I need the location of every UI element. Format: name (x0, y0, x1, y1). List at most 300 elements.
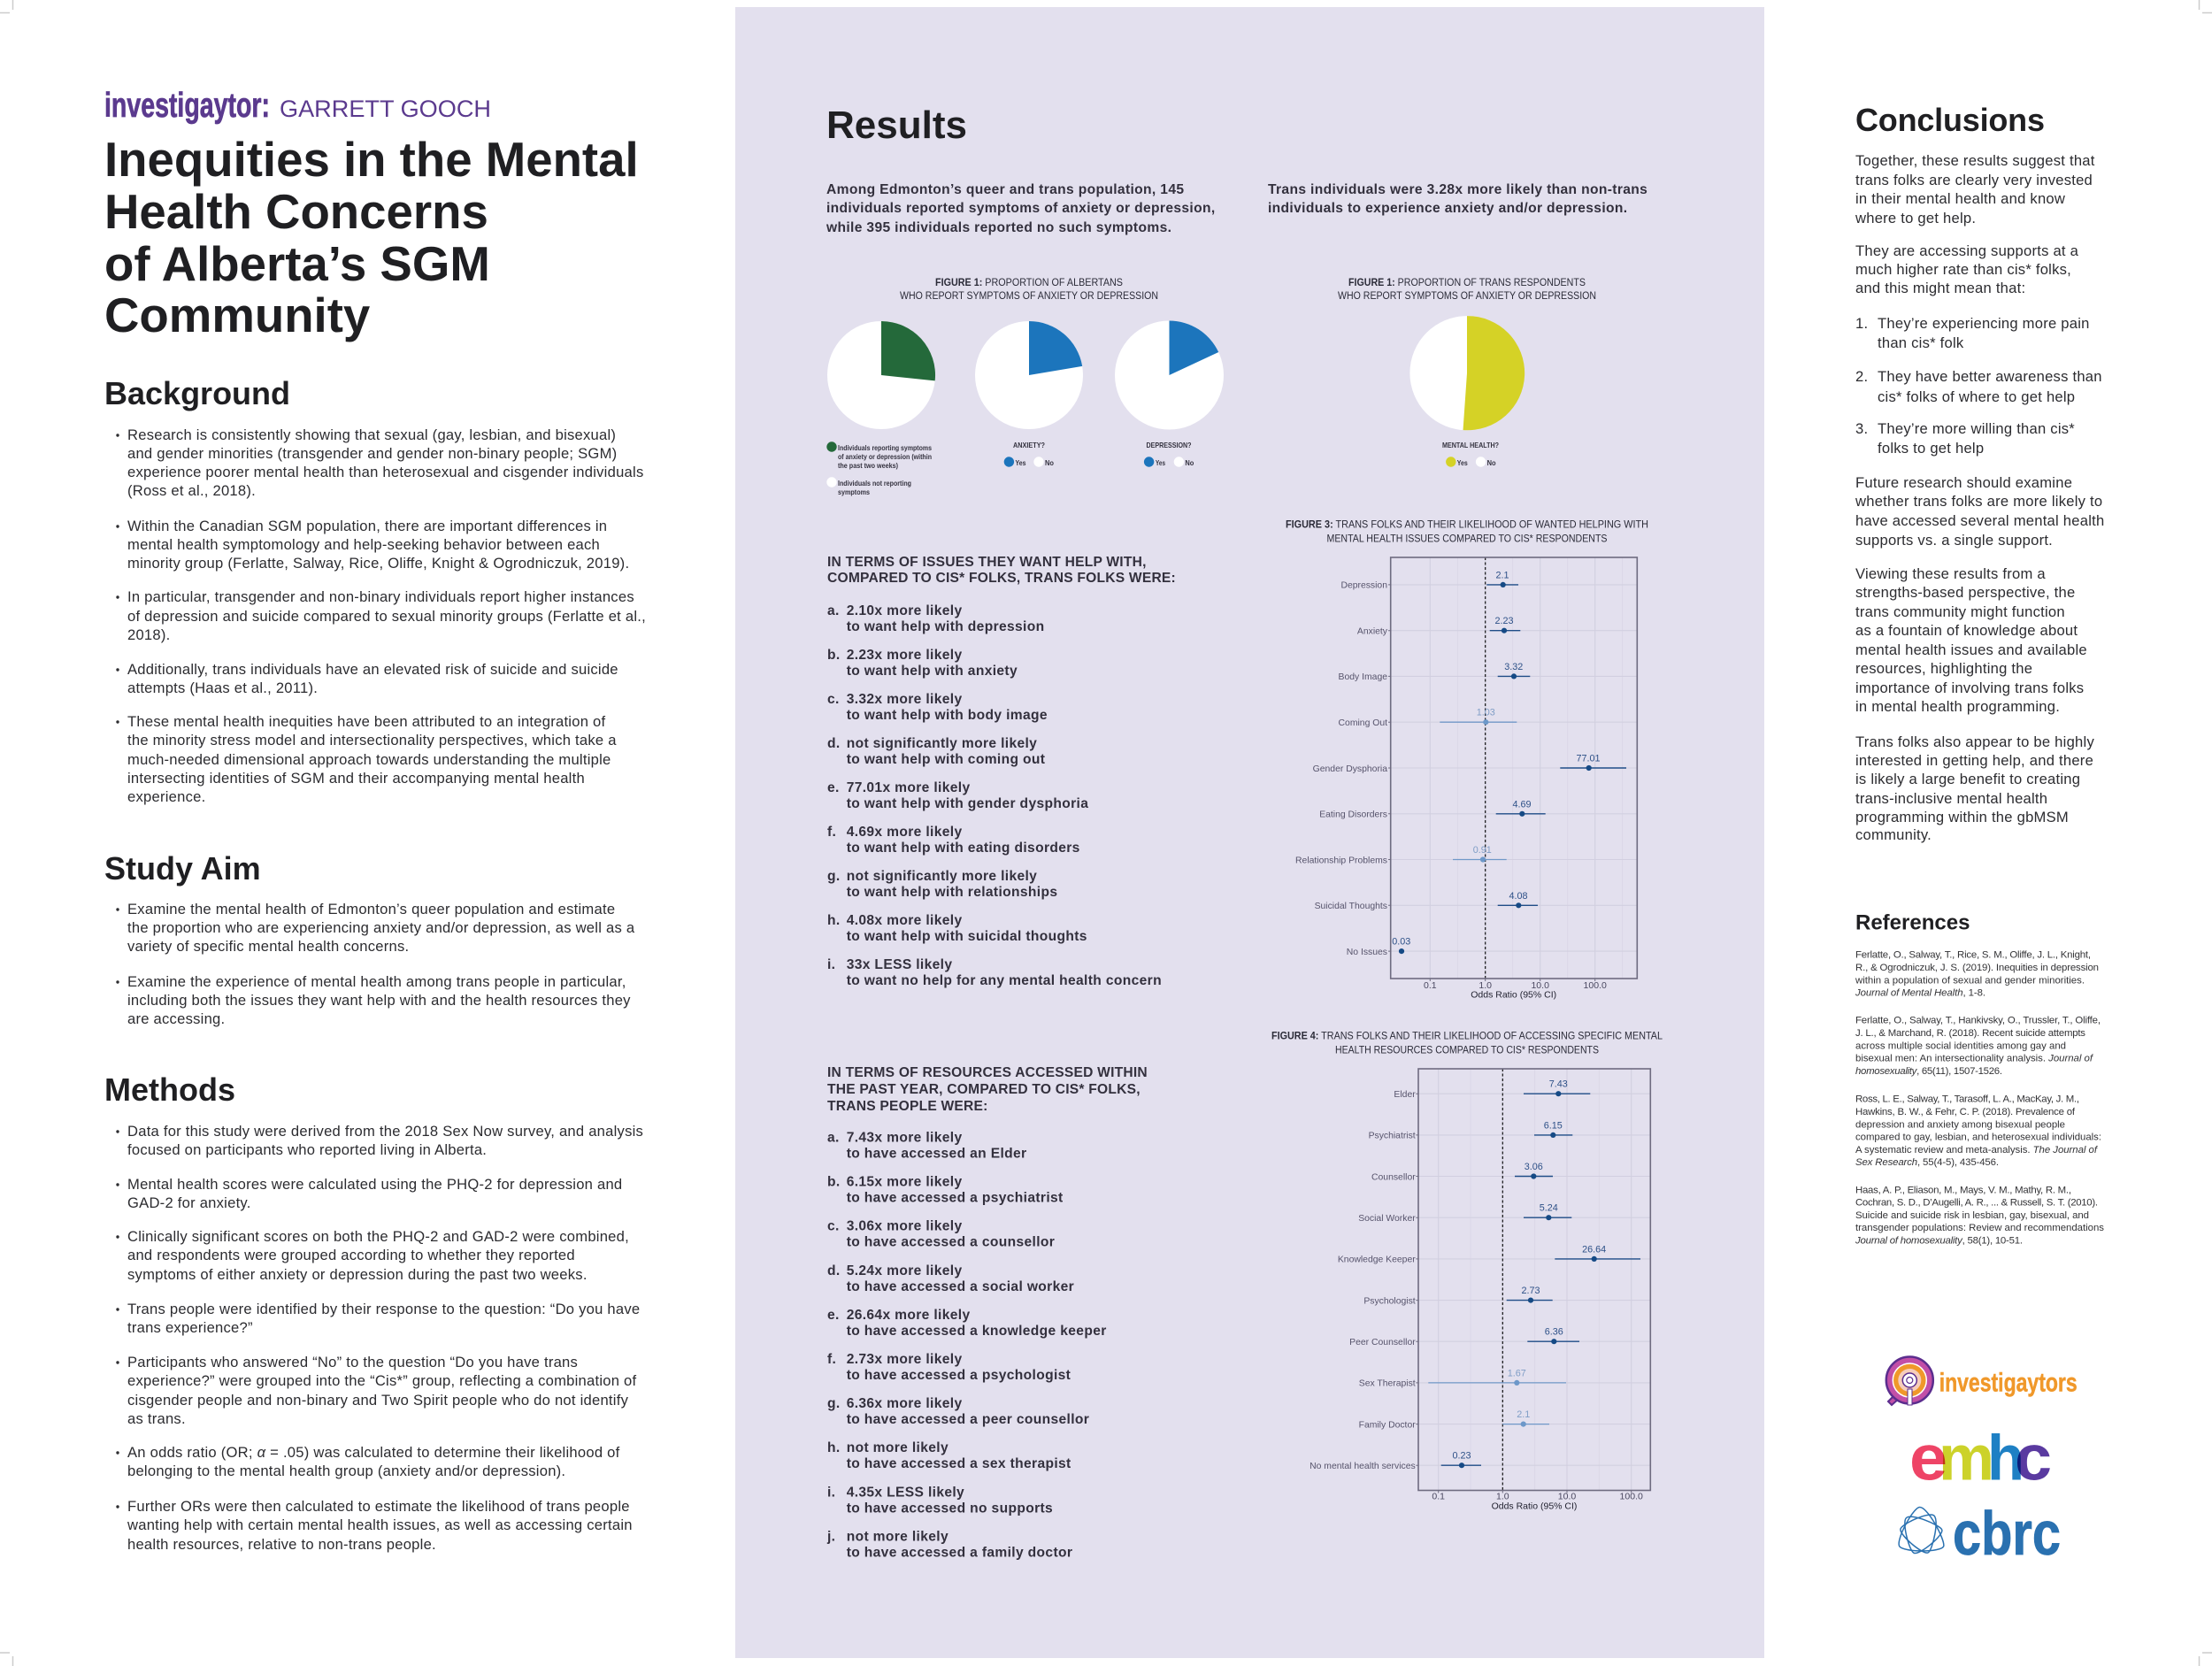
legend: depression: Yes (1156, 458, 1165, 467)
text block: background bullets: minority group (Ferlatte, Salway, Rice, Oliffe, Knight & Ogrodniczuk, 2019). (127, 555, 629, 572)
text block: conclusions: where to get help. (1855, 210, 1976, 226)
list: issues trans folks want help with: g. (827, 869, 841, 884)
heading: references: References (1855, 911, 1970, 935)
axis: figure 3 (1424, 980, 1607, 1000)
list: resources accessed: e. (827, 1308, 840, 1323)
row: knowledge keeper: 26.64 (1582, 1244, 1606, 1255)
text block: conclusions: They’re more willing than cis* (1878, 420, 2075, 437)
title: Community (104, 288, 371, 342)
list: issues trans folks want help with: to want help with depression (847, 619, 1044, 634)
axis: figure 3: 1.0 (1479, 980, 1492, 991)
axis: figure 4 (1432, 1492, 1643, 1512)
heading: conclusions: Conclusions (1855, 102, 2045, 138)
axis: figure 4: 0.1 (1432, 1492, 1445, 1502)
list: resources accessed: to have accessed no supports (847, 1501, 1053, 1516)
list: resources accessed: d. (827, 1263, 841, 1278)
text block: study aim bullets (116, 901, 635, 1027)
text block: methods bullets: Trans people were identified by their response to the question: “Do you have (127, 1301, 640, 1317)
text block: methods bullets: trans experience?” (127, 1319, 253, 1336)
header: investigaytor byline: GARRETT GOOCH (280, 96, 491, 122)
list: issues trans folks want help with: to want help with suicidal thoughts (847, 929, 1087, 944)
list: resources accessed: 26.64x more likely (847, 1308, 971, 1323)
axis: figure 3: 0.1 (1424, 980, 1437, 991)
text block: references: Ferlatte, O., Salway, T., Hankivsky, O., Trussler, T., Oliffe, (1855, 1016, 2101, 1026)
text block: references: Hawkins, B. W., & Fehr, C. P. (2018). Prevalence of (1855, 1107, 2076, 1117)
text block: methods bullets: Participants who answered “No” to the question “Do you have trans (127, 1354, 578, 1370)
text block: conclusions: 2. (1855, 368, 1868, 385)
row: suicidal thoughts: 4.08 (1509, 891, 1528, 902)
list: issues trans folks want help with: to want help with body image (847, 708, 1048, 723)
list: issues trans folks want help with: not significantly more likely (847, 736, 1037, 751)
legend: overall symptoms: the past two weeks) (838, 461, 898, 470)
list: issues trans folks want help with: a. (827, 603, 840, 618)
row: no mental health services: No mental health services (1310, 1462, 1416, 1471)
text block: methods bullets: as trans. (127, 1410, 186, 1427)
logo: emhc: e (1909, 1424, 1947, 1494)
text block: conclusions: much higher rate than cis* folks, (1855, 261, 2071, 278)
heading: methods: Methods (104, 1071, 235, 1108)
row: no issues: 0.03 (1392, 937, 1410, 948)
row: anxiety (1357, 616, 1520, 637)
legend: depression: No (1185, 458, 1194, 467)
row: psychologist: Psychologist (1363, 1296, 1416, 1306)
row: body image: Body Image (1339, 672, 1387, 682)
row: family doctor: Family Doctor (1359, 1420, 1416, 1430)
row: psychiatrist: 6.15 (1544, 1120, 1563, 1131)
list: issues trans folks want help with: e. (827, 780, 840, 795)
text block: methods bullets: cisgender people and non-binary and Two Spirit people who do not identify (127, 1392, 629, 1409)
list: resources accessed: 4.35x LESS likely (847, 1485, 964, 1500)
row: psychologist (1363, 1286, 1553, 1306)
figure title: figure 3: FIGURE 3: TRANS FOLKS AND THEIR LIKELIHOOD OF WANTED HELPING WITH (1286, 520, 1648, 531)
list: resources accessed: to have accessed a knowledge keeper (847, 1324, 1107, 1339)
row: coming out: 1.03 (1477, 708, 1495, 718)
axis: figure 3: 10.0 (1531, 980, 1549, 991)
list: resources accessed: to have accessed a family doctor (847, 1545, 1072, 1560)
logo: cbrc: cbrc (1953, 1499, 2061, 1568)
row: sex therapist: 1.67 (1508, 1368, 1526, 1378)
text block: methods bullets: symptoms of either anxiety or depression during the past two weeks. (127, 1266, 588, 1283)
text block: background bullets: In particular, transgender and non-binary individuals report higher instances (127, 588, 634, 605)
figure title: proportion of trans respondents: FIGURE 1: PROPORTION OF TRANS RESPONDENTS (1348, 278, 1586, 288)
text block: references: depression and anxiety among bisexual people (1855, 1119, 2065, 1130)
list: issues trans folks want help with: 3.32x more likely (847, 692, 962, 707)
text block: conclusions: Future research should examine (1855, 474, 2072, 491)
text block: conclusions: interested in getting help, and there (1855, 752, 2093, 769)
list: issues trans folks want help with: 77.01x more likely (847, 780, 971, 795)
row: suicidal thoughts: Suicidal Thoughts (1315, 902, 1387, 911)
text block: references: homosexuality, 65(11), 1507-1526. (1855, 1066, 2002, 1077)
text block: methods bullets: Further ORs were then calculated to estimate the likelihood of trans people (127, 1498, 630, 1515)
list: resources accessed: to have accessed a social worker (847, 1279, 1074, 1294)
row: depression: Depression (1340, 581, 1387, 591)
list: issues trans folks want help with: 2.23x more likely (847, 648, 962, 663)
list: resources accessed: 2.73x more likely (847, 1352, 962, 1367)
axis: figure 4: 100.0 (1620, 1492, 1643, 1502)
text block: background bullets: attempts (Haas et al., 2011). (127, 679, 318, 696)
text block: references: compared to gay, lesbian, and heterosexual individuals: (1855, 1132, 2101, 1143)
axis: figure 4: Odds Ratio (95% CI) (1492, 1501, 1577, 1512)
list: issues trans folks want help with: c. (827, 692, 840, 707)
text block: methods bullets: experience?” were grouped into the “Cis*” group, reflecting a combination of (127, 1372, 637, 1389)
list: resources accessed: to have accessed a peer counsellor (847, 1412, 1089, 1427)
text block: conclusions: whether trans folks are more likely to (1855, 493, 2102, 510)
row: family doctor (1359, 1409, 1549, 1430)
legend: overall symptoms: of anxiety or depression (within (838, 452, 932, 461)
text block: references: Journal of Mental Health, 1-8. (1855, 988, 1985, 999)
list: issues trans folks want help with: not significantly more likely (847, 869, 1037, 884)
row: peer counsellor: Peer Counsellor (1349, 1338, 1416, 1347)
row: knowledge keeper (1338, 1244, 1640, 1265)
text block: conclusions: in mental health programming. (1855, 698, 2060, 715)
figure title: figure 4 (1271, 1032, 1663, 1056)
text block: conclusions: than cis* folk (1878, 334, 1964, 351)
text block: methods bullets: wanting help with certain mental health issues, as well as accessing certain (127, 1516, 633, 1533)
row: sex therapist (1359, 1368, 1566, 1389)
text block: references: Sex Research, 55(4-5), 435-456. (1855, 1157, 1999, 1168)
text block: conclusions: Trans folks also appear to be highly (1855, 733, 2094, 750)
list: resources accessed: to have accessed a sex therapist (847, 1456, 1071, 1471)
text block: results summary left: Among Edmonton’s queer and trans population, 145 (826, 182, 1184, 197)
list: issues trans folks want help with: to want help with coming out (847, 752, 1045, 767)
row: eating disorders: Eating Disorders (1319, 810, 1387, 820)
row: no issues: No Issues (1347, 948, 1387, 957)
text block: study aim bullets: variety of specific mental health concerns. (127, 938, 409, 955)
text block: background bullets (116, 426, 646, 805)
text block: conclusions: importance of involving trans folks (1855, 679, 2084, 696)
legend: overall symptoms: symptoms (838, 488, 870, 496)
row: anxiety: Anxiety (1357, 626, 1388, 637)
row: no mental health services: 0.23 (1452, 1451, 1471, 1462)
text block: conclusions: and this might mean that: (1855, 280, 2025, 296)
text block: conclusions: They’re experiencing more pain (1878, 315, 2090, 332)
list: resources accessed: 3.06x more likely (847, 1219, 962, 1234)
list: issues trans folks want help with: f. (827, 825, 836, 840)
list: issues trans folks want help with: 2.10x more likely (847, 603, 962, 618)
list: issues trans folks want help with: 4.69x more likely (847, 825, 962, 840)
row: counsellor: Counsellor (1371, 1172, 1416, 1182)
list: resources accessed: j. (826, 1529, 835, 1544)
pie: overall symptoms (827, 321, 935, 429)
list: resources accessed: c. (827, 1219, 840, 1234)
list: issues trans folks want help with: COMPARED TO CIS* FOLKS, TRANS FOLKS WERE: (827, 571, 1176, 586)
chart: figure 4 forest plot (1310, 1069, 1650, 1512)
logo: emhc: h (1987, 1424, 2024, 1494)
row: counsellor: 3.06 (1525, 1162, 1543, 1172)
text block: conclusions: They have better awareness than (1878, 368, 2102, 385)
row: no mental health services (1310, 1451, 1481, 1471)
legend: overall symptoms (826, 441, 932, 496)
figure title: figure 3 (1286, 520, 1648, 545)
text block: conclusions: folks to get help (1878, 440, 1984, 457)
text block: conclusions: They are accessing supports at a (1855, 242, 2079, 259)
title (104, 133, 639, 342)
text block: background bullets: intersecting identities of SGM and their accompanying mental health (127, 770, 585, 787)
row: gender dysphoria: 77.01 (1576, 754, 1601, 764)
text block: background bullets: Additionally, trans individuals have an elevated risk of suicide and suicide (127, 661, 618, 678)
row: social worker: 5.24 (1540, 1203, 1558, 1214)
list: issues trans folks want help with: to want no help for any mental health concern (847, 973, 1162, 988)
text block: conclusions: in their mental health and know (1855, 190, 2066, 207)
text block: study aim bullets: including both the issues they want help with and the health resources they (127, 992, 631, 1009)
text block: background bullets: and gender minorities (transgender and gender non-binary people; SGM) (127, 445, 617, 462)
axis: figure 4: 1.0 (1496, 1492, 1509, 1502)
list: issues trans folks want help with: to want help with gender dysphoria (847, 796, 1088, 811)
row: coming out: Coming Out (1339, 718, 1387, 728)
row: sex therapist: Sex Therapist (1359, 1379, 1416, 1389)
list: resources accessed: 6.15x more likely (847, 1175, 962, 1190)
row: depression: 2.1 (1495, 570, 1509, 580)
figure title: figure 4: HEALTH RESOURCES COMPARED TO CIS* RESPONDENTS (1335, 1046, 1599, 1056)
text block: background bullets: much-needed dimensional approach towards understanding the multiple (127, 751, 611, 768)
text block: references: within a population of sexual and gender minorities. (1855, 975, 2085, 986)
list: resources accessed: THE PAST YEAR, COMPARED TO CIS* FOLKS, (827, 1082, 1141, 1097)
text block: references: Haas, A. P., Eliason, M., Mays, V. M., Mathy, R. M., (1855, 1185, 2071, 1195)
heading: results: Results (826, 104, 967, 147)
row: psychiatrist: Psychiatrist (1369, 1132, 1416, 1141)
figure title: proportion of albertans (900, 278, 1158, 302)
text block: background bullets: 2018). (127, 626, 170, 643)
text block: methods bullets: GAD-2 for anxiety. (127, 1194, 251, 1211)
text block: references: across multiple social identities among gay and (1855, 1040, 2066, 1051)
list: issues trans folks want help with (827, 555, 1176, 988)
row: psychologist: 2.73 (1521, 1286, 1540, 1296)
text block: conclusions: supports vs. a single support. (1855, 532, 2053, 549)
text block: references: Ferlatte, O., Salway, T., Rice, S. M., Oliffe, J. L., Knight, (1855, 950, 2091, 961)
list: issues trans folks want help with: 33x LESS likely (847, 957, 952, 972)
row: elder: 7.43 (1549, 1079, 1568, 1090)
row: coming out (1339, 708, 1517, 728)
panel: results background (735, 7, 1764, 1658)
text block: conclusions: as a fountain of knowledge about (1855, 622, 2078, 639)
axis: figure 3: 100.0 (1584, 980, 1607, 991)
legend: overall symptoms: Individuals reporting symptoms (838, 443, 932, 452)
text block: results summary left: individuals reported symptoms of anxiety or depression, (826, 201, 1216, 216)
text block: background bullets: Within the Canadian SGM population, there are important differences in (127, 518, 607, 534)
text block: references: R., & Ogrodniczuk, J. S. (2019). Inequities in depression (1855, 963, 2099, 973)
row: relationship problems: 0.91 (1473, 845, 1492, 856)
list: issues trans folks want help with: to want help with eating disorders (847, 841, 1080, 856)
text block: conclusions: Viewing these results from a (1855, 565, 2046, 582)
row: psychiatrist (1369, 1120, 1572, 1141)
logo: investigaytors (1886, 1357, 2078, 1405)
list: resources accessed: h. (827, 1440, 841, 1455)
text block: conclusions: resources, highlighting the (1855, 660, 2032, 677)
list: resources accessed: g. (827, 1396, 841, 1411)
legend: anxiety: ANXIETY? (1013, 441, 1045, 449)
list: resources accessed: to have accessed a counsellor (847, 1235, 1055, 1250)
figure title: proportion of trans respondents: WHO REPORT SYMPTOMS OF ANXIETY OR DEPRESSION (1338, 291, 1596, 302)
text block: study aim bullets: are accessing. (127, 1010, 225, 1027)
text block: references: Journal of homosexuality, 58(1), 10-51. (1855, 1235, 2023, 1246)
row: social worker: Social Worker (1358, 1214, 1416, 1224)
icon: magnifying target (1886, 1357, 1933, 1405)
legend: anxiety: Yes (1016, 458, 1026, 467)
row: family doctor: 2.1 (1517, 1409, 1530, 1420)
row: peer counsellor (1349, 1327, 1579, 1347)
text block: references: A systematic review and meta-analysis. The Journal of (1855, 1145, 2099, 1155)
header: investigaytor byline (104, 87, 491, 125)
legend: anxiety (1004, 441, 1054, 467)
text block: conclusions: 3. (1855, 420, 1868, 437)
list: resources accessed: not more likely (847, 1440, 949, 1455)
figure title: figure 4: FIGURE 4: TRANS FOLKS AND THEIR LIKELIHOOD OF ACCESSING SPECIFIC MENTAL (1271, 1032, 1663, 1042)
text block: background bullets: experience poorer mental health than heterosexual and cisgender individuals (127, 464, 643, 480)
text block: conclusions: trans folks are clearly very invested (1855, 172, 2093, 188)
text block: methods bullets: focused on participants who reported living in Alberta. (127, 1141, 487, 1158)
text block: conclusions: mental health issues and available (1855, 641, 2087, 658)
legend: overall symptoms: Individuals not reporting (838, 479, 911, 488)
text block: conclusions: strengths-based perspective, the (1855, 584, 2075, 601)
text block: results summary left: while 395 individuals reported no such symptoms. (826, 220, 1171, 235)
list: resources accessed: 6.36x more likely (847, 1396, 962, 1411)
text block: conclusions: trans community might function (1855, 603, 2065, 620)
row: eating disorders: 4.69 (1512, 799, 1532, 810)
row: gender dysphoria: Gender Dysphoria (1313, 764, 1387, 774)
text block: references: Cochran, S. D., D’Augelli, A. R., ... & Russell, S. T. (2010). (1855, 1198, 2098, 1209)
list: resources accessed: b. (827, 1175, 841, 1190)
figure title: proportion of albertans: FIGURE 1: PROPORTION OF ALBERTANS (935, 278, 1123, 288)
text block: conclusions: is likely a large benefit to creating (1855, 771, 2080, 787)
list: resources accessed: not more likely (847, 1529, 949, 1544)
text block: study aim bullets: Examine the mental health of Edmonton’s queer population and estimate (127, 901, 615, 917)
logo: emhc: c (2015, 1424, 2052, 1494)
text block: background bullets: These mental health inequities have been attributed to an integration of (127, 713, 605, 730)
text block: references: Ross, L. E., Salway, T., Tarasoff, L. A., MacKay, J. M., (1855, 1094, 2079, 1105)
list: issues trans folks want help with: 4.08x more likely (847, 913, 962, 928)
text block: references: Suicide and suicide risk in lesbian, gay, bisexual, and (1855, 1210, 2089, 1221)
text block: background bullets: experience. (127, 788, 205, 805)
legend: trans mental health: MENTAL HEALTH? (1442, 441, 1499, 449)
legend: trans mental health: Yes (1457, 458, 1468, 467)
row: counsellor (1371, 1162, 1553, 1182)
logo: emhc (1909, 1424, 2052, 1494)
row: relationship problems: Relationship Problems (1295, 856, 1387, 865)
list: resources accessed: f. (827, 1352, 836, 1367)
text block: methods bullets: belonging to the mental health group (anxiety and/or depression). (127, 1463, 565, 1479)
legend: depression: DEPRESSION? (1147, 441, 1191, 449)
heading: study aim: Study Aim (104, 850, 261, 887)
row: elder (1394, 1079, 1590, 1100)
row: body image: 3.32 (1504, 662, 1523, 672)
list: issues trans folks want help with: d. (827, 736, 841, 751)
list: issues trans folks want help with: i. (827, 957, 835, 972)
list: resources accessed: 7.43x more likely (847, 1131, 962, 1145)
logo: emhc: m (1939, 1424, 1994, 1494)
list: resources accessed: TRANS PEOPLE WERE: (827, 1099, 988, 1114)
row: gender dysphoria (1313, 754, 1626, 774)
title: Inequities in the Mental (104, 133, 639, 187)
pie: trans mental health (1409, 316, 1525, 430)
text block: background bullets: Research is consistently showing that sexual (gay, lesbian, and bisexual) (127, 426, 616, 443)
text block: conclusions: programming within the gbMSM (1855, 809, 2069, 825)
row: no issues (1347, 937, 1410, 957)
text block: background bullets: mental health symptomology and help-seeking behavior between each (127, 536, 600, 553)
text block: methods bullets: Mental health scores were calculated using the PHQ-2 for depression and (127, 1176, 622, 1193)
text block: conclusions: 1. (1855, 315, 1868, 332)
text block: conclusions: Together, these results suggest that (1855, 152, 2095, 169)
legend: anxiety: No (1045, 458, 1054, 467)
list: resources accessed: to have accessed a psychiatrist (847, 1191, 1064, 1206)
title: Health Concerns (104, 185, 488, 239)
heading: background: Background (104, 375, 290, 411)
text block: results summary right: individuals to experience anxiety and/or depression. (1268, 201, 1627, 216)
text block: methods bullets: An odds ratio (OR; α = .05) was calculated to determine their likelihood of (127, 1444, 620, 1461)
list: issues trans folks want help with: h. (827, 913, 841, 928)
text block: conclusions: community. (1855, 826, 1932, 843)
row: suicidal thoughts (1315, 891, 1538, 911)
list: issues trans folks want help with: b. (827, 648, 841, 663)
text block: study aim bullets: Examine the experience of mental health among trans people in particular, (127, 973, 626, 990)
list: resources accessed (826, 1065, 1148, 1560)
list: resources accessed: IN TERMS OF RESOURCES ACCESSED WITHIN (827, 1065, 1148, 1080)
list: resources accessed: to have accessed a psychologist (847, 1368, 1071, 1383)
logo: investigaytors: investigaytors (1939, 1369, 2078, 1398)
list: issues trans folks want help with: IN TERMS OF ISSUES THEY WANT HELP WITH, (827, 555, 1147, 570)
row: depression (1340, 570, 1518, 591)
legend: trans mental health: No (1487, 458, 1496, 467)
row: relationship problems (1295, 845, 1507, 865)
text block: results summary right (1268, 182, 1647, 216)
text block: study aim bullets: the proportion who are experiencing anxiety and/or depression, as well as a (127, 919, 635, 936)
logo: cbrc (1893, 1499, 2061, 1568)
row: peer counsellor: 6.36 (1545, 1327, 1563, 1338)
text block: references: bisexual men: An intersectionality analysis. Journal of (1855, 1054, 2094, 1064)
text block: background bullets: (Ross et al., 2018). (127, 482, 256, 499)
row: knowledge keeper: Knowledge Keeper (1338, 1255, 1416, 1265)
row: social worker (1358, 1203, 1571, 1224)
row: body image (1339, 662, 1530, 682)
text block: references: J. L., & Marchand, R. (2018). Recent suicide attempts (1855, 1028, 2085, 1039)
row: anxiety: 2.23 (1494, 616, 1514, 626)
axis: figure 4: 10.0 (1558, 1492, 1576, 1502)
text block: background bullets: the minority stress model and intersectionality perspectives, which take a (127, 732, 617, 749)
header: investigaytor byline: investigaytor: (104, 87, 270, 125)
text block: conclusions: trans-inclusive mental health (1855, 790, 2047, 807)
list: issues trans folks want help with: to want help with relationships (847, 885, 1057, 900)
chart: figure 3 forest plot (1295, 557, 1637, 1000)
figure title: proportion of trans respondents (1338, 278, 1596, 302)
list: resources accessed: 5.24x more likely (847, 1263, 962, 1278)
text block: conclusions: have accessed several mental health (1855, 512, 2104, 529)
text block: results summary right: Trans individuals were 3.28x more likely than non-trans (1268, 182, 1647, 197)
legend: trans mental health (1442, 441, 1499, 467)
text block: methods bullets: health resources, relative to non-trans people. (127, 1536, 436, 1553)
figure title: proportion of albertans: WHO REPORT SYMPTOMS OF ANXIETY OR DEPRESSION (900, 291, 1158, 302)
figure title: figure 3: MENTAL HEALTH ISSUES COMPARED TO CIS* RESPONDENTS (1327, 534, 1608, 545)
text block: conclusions: cis* folks of where to get help (1878, 388, 2075, 405)
text block: references: transgender populations: Review and recommendations (1855, 1223, 2104, 1233)
pie: anxiety (975, 321, 1083, 429)
text block: methods bullets (116, 1123, 643, 1553)
axis: figure 3: Odds Ratio (95% CI) (1471, 989, 1556, 1000)
legend: depression (1144, 441, 1194, 467)
icon: interlaced triangles (1893, 1504, 1949, 1556)
list: issues trans folks want help with: to want help with anxiety (847, 664, 1018, 679)
title: of Alberta’s SGM (104, 237, 490, 291)
text block: results summary left (826, 182, 1216, 235)
text block: conclusions (1855, 152, 2104, 843)
row: elder: Elder (1394, 1090, 1416, 1100)
text block: methods bullets: Data for this study were derived from the 2018 Sex Now survey, and analysis (127, 1123, 643, 1140)
list: resources accessed: to have accessed an Elder (847, 1147, 1026, 1161)
list: resources accessed: a. (827, 1131, 840, 1145)
text block: references (1855, 950, 2104, 1246)
row: eating disorders (1319, 799, 1546, 820)
text block: methods bullets: and respondents were grouped according to whether they reported (127, 1247, 575, 1263)
text block: background bullets: of depression and suicide compared to sexual minority groups (Ferlatte et al., (127, 608, 646, 625)
text block: methods bullets: Clinically significant scores on both the PHQ-2 and GAD-2 were combined, (127, 1228, 629, 1245)
